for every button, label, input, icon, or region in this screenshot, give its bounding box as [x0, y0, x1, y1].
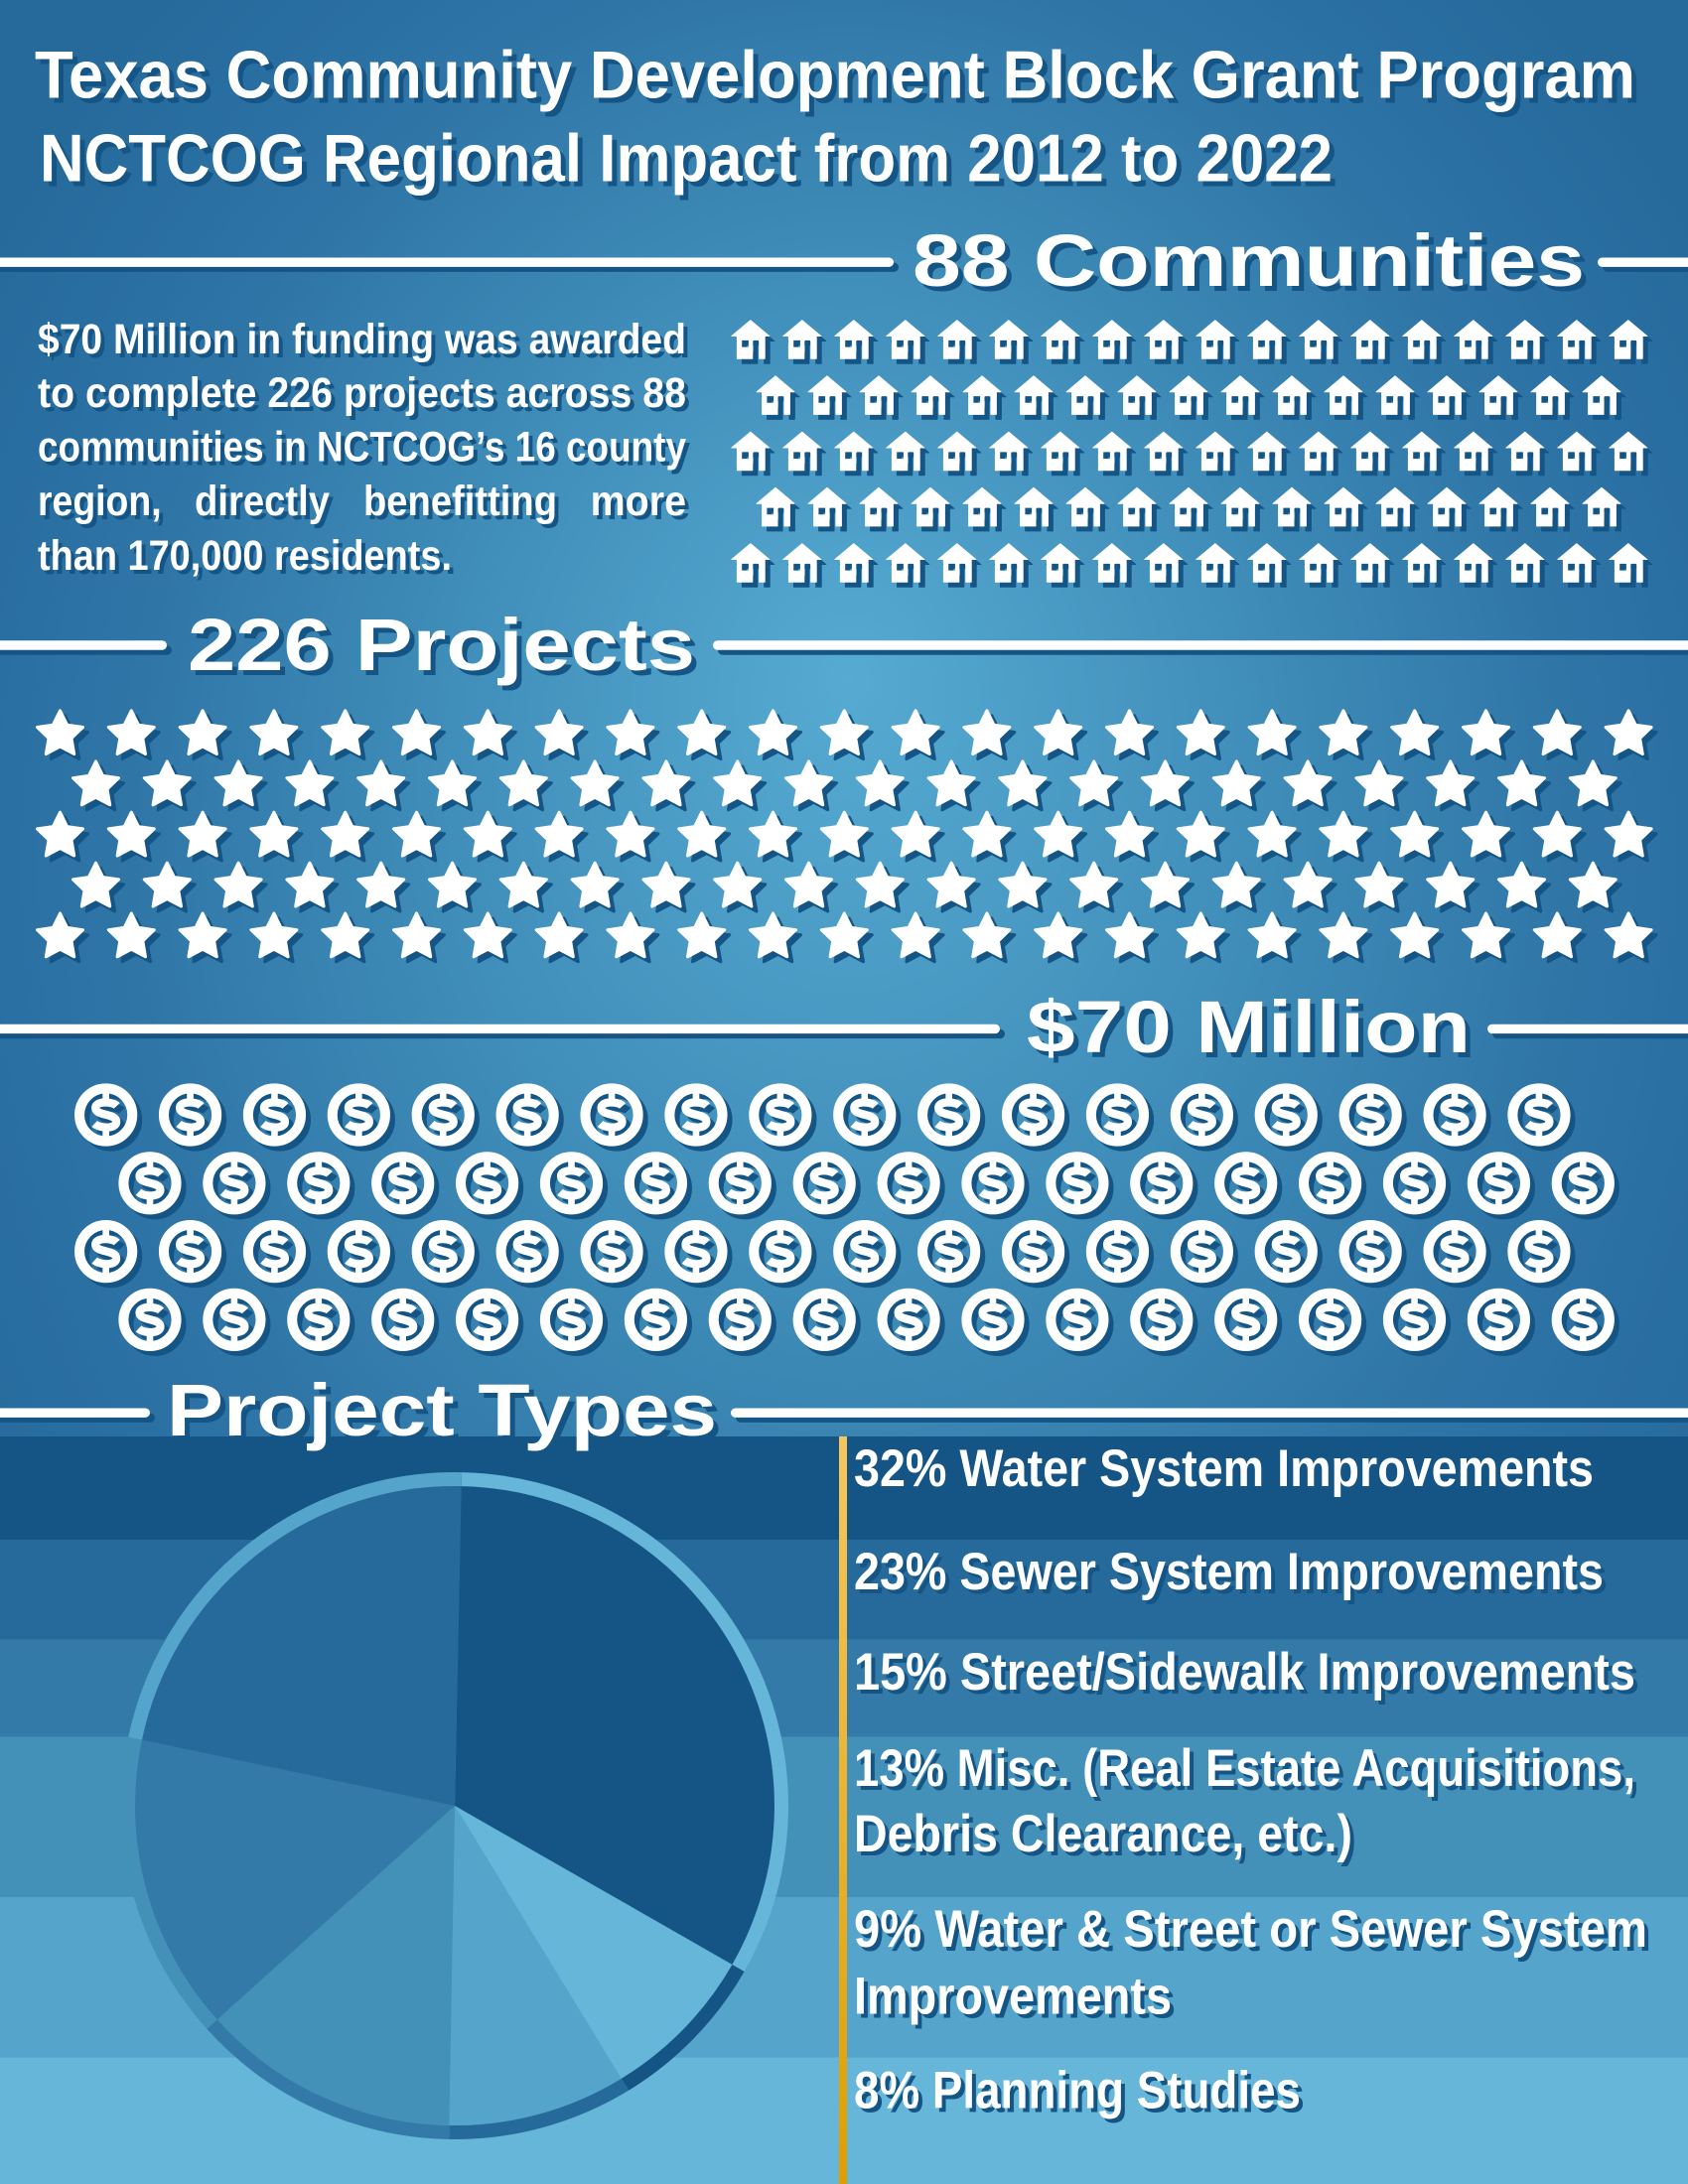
text block: summary paragraph: [38, 316, 686, 580]
text block: summary paragraph: than 170,000 residents.: [38, 532, 452, 580]
heading: $70 Million: $70 Million: [1027, 986, 1471, 1068]
title: [35, 38, 1635, 197]
text block: summary paragraph: directly: [195, 478, 330, 525]
legend divider: gold bar: [839, 1436, 847, 2184]
slice: 9% water and street: [449, 1806, 622, 2125]
panel: project type colour bands: [0, 1436, 1688, 2184]
background gradient: [0, 0, 1688, 1436]
heading: 226 Projects: 226 Projects: [188, 604, 695, 686]
text block: summary paragraph: to complete 226 projects across 88: [38, 369, 686, 417]
heading: 226 Projects: [0, 604, 1688, 686]
text block: summary paragraph: $70 Million in funding was awarded: [38, 316, 686, 363]
heading: Project Types: [0, 1369, 1688, 1451]
text block: summary paragraph: region,: [38, 478, 162, 525]
legend: project type percentages: Improvements: [854, 1968, 1172, 2026]
heading: 88 Communities: 88 Communities: [913, 219, 1585, 302]
legend: project type percentages: [854, 1439, 1647, 2120]
heading: Project Types: Project Types: [167, 1369, 717, 1451]
slice: 8% planning: [455, 1806, 732, 2079]
icon grid: 88 houses: [732, 320, 1647, 582]
heading: $70 Million: [0, 986, 1688, 1068]
text block: summary paragraph: benefitting: [363, 478, 557, 525]
legend: project type percentages: 32% Water System Improvements: [854, 1439, 1594, 1498]
slice: 15% street: [135, 1740, 455, 2019]
legend: project type percentages: Debris Clearance, etc.): [854, 1805, 1352, 1863]
icon grid: stars: [38, 711, 1651, 957]
icon grid: dollar coins: [79, 1087, 1610, 1347]
pie outer ring: [128, 1479, 781, 2132]
slice: 23% sewer: [142, 1486, 462, 1806]
legend: project type percentages: 23% Sewer System Improvements: [854, 1543, 1604, 1601]
legend: project type percentages: 8% Planning Studies: [854, 2061, 1301, 2120]
slice: 13% misc: [217, 1806, 455, 2125]
text block: summary paragraph: more: [591, 478, 686, 525]
pie chart: project types: [128, 1479, 781, 2132]
slice: 32% water: [455, 1486, 774, 1965]
text block: summary paragraph: communities in NCTCOG’s 16 county: [38, 423, 686, 471]
title: NCTCOG Regional Impact from 2012 to 2022: [40, 121, 1333, 197]
heading: 88 Communities: [0, 219, 1688, 302]
